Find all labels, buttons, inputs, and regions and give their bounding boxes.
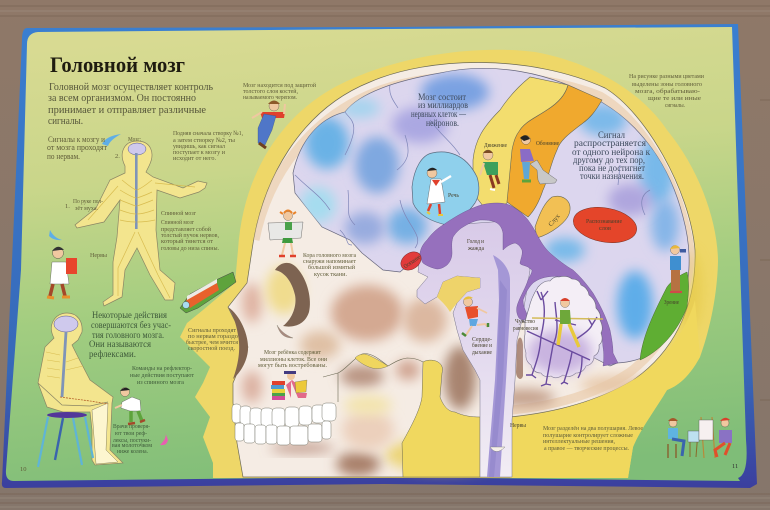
nose hollow (277, 325, 293, 338)
boy with dog (520, 135, 557, 184)
colour zones note: На рисунке разными цветами (629, 73, 704, 80)
spinal cord description: Спинной мозг (161, 219, 194, 226)
flap instruction text: увидишь, как сигнал (173, 143, 226, 150)
spinal cord description (161, 219, 219, 252)
zone: word recognition (571, 203, 639, 247)
icon: blue flap marks (49, 134, 121, 240)
train speed caption: по нервам гораздо (188, 333, 238, 340)
zone labels: Обоняние (536, 140, 559, 147)
skull caption: толстого слоя костей, (243, 88, 298, 95)
reflex text: рефлексами. (89, 349, 136, 360)
neurons caption: нервных клеток — (411, 109, 467, 119)
reflex commands caption: ные действия поступают (130, 372, 194, 379)
zone: word recognition: слов (599, 225, 611, 232)
neurons caption: из миллиардов (418, 100, 468, 110)
doctors hammer caption: Врачи проверя- (113, 423, 150, 430)
yellow patch above heartbeat zone (437, 276, 480, 312)
icon: pink flap mark (160, 432, 168, 445)
neurons caption: Мозг состоит (418, 92, 466, 102)
purple band (420, 203, 618, 366)
speech doctor (427, 168, 451, 215)
signal spread caption: распространяется (574, 138, 646, 148)
zone: movement (473, 77, 568, 215)
colour zones note: сигналы. (665, 102, 685, 109)
hemispheres caption (543, 425, 643, 452)
reflex text (89, 310, 171, 360)
reflex commands caption (130, 365, 194, 386)
zone: smell (507, 85, 602, 217)
caption: signals through nerves (47, 135, 107, 161)
reflex commands caption: Команды на рефлектор- (132, 365, 192, 372)
signal spread caption: от одного нейрона к (572, 147, 651, 157)
spinal cord description: толстый пучок нервов, (161, 232, 219, 239)
zone: hearing (535, 196, 570, 238)
zone labels: Сердце- (472, 336, 492, 343)
doctors hammer caption: вая молоточком (112, 442, 152, 449)
cortex caption: кусок ткани. (314, 271, 347, 278)
cortex caption (303, 252, 356, 278)
tightrope walker (532, 298, 603, 347)
cortex caption: большой измятый (308, 264, 355, 271)
page numbers: 11 (732, 463, 738, 470)
doctors hammer caption: ниже колена. (117, 448, 148, 455)
man with binoculars (670, 245, 686, 292)
neurons caption: нейронов. (426, 118, 459, 128)
zone labels: Движение (484, 142, 507, 149)
man scratching head (252, 100, 285, 148)
labels on nervous system figure: 2. (115, 153, 120, 160)
doctors hammer caption: лексы, постуки- (113, 437, 151, 444)
caption: signals through nerves: Сигналы к мозгу и (48, 135, 106, 144)
cerebellum (524, 276, 602, 386)
signal spread caption: пока не достигнет (579, 163, 645, 173)
hemispheres caption: интеллектуальные решения, (543, 438, 615, 445)
caption: signals through nerves: по нервам. (47, 152, 80, 161)
skull caption: называемого черепом. (243, 94, 297, 101)
signal spread caption (572, 130, 651, 181)
labels on nervous system figure: Мозг: (128, 136, 141, 143)
spinal cord description: головы до низа спины. (161, 245, 219, 252)
zone: speech bubble: Речь (448, 192, 459, 199)
eye socket (275, 263, 310, 327)
yellow lower band right of the spine (512, 300, 700, 478)
flap instruction text (173, 130, 243, 162)
intro text: принимает и отправляет различные (48, 104, 206, 116)
skull caption: Мозг находится под защитой (243, 82, 316, 89)
figure 2: seated reflex body (38, 313, 123, 465)
reflex text: Некоторые действия (92, 310, 168, 321)
flap instruction text: исходит от него. (173, 155, 216, 162)
intro text: за всем организмом. Он постоянно (48, 92, 196, 104)
brain hemisphere (293, 68, 689, 366)
doctor with clipboard (47, 247, 77, 298)
page numbers (20, 463, 738, 473)
signal spread caption: Сигнал (598, 130, 625, 140)
labels on nervous system figure: Нервы (90, 252, 108, 259)
yellow lower head area (402, 360, 480, 477)
zone: hearing: Слух (547, 212, 562, 228)
cortex caption: Кора головного мозга (303, 252, 356, 259)
train speed caption: скоростной поезд. (188, 345, 235, 352)
title: Головной мозг (50, 52, 185, 77)
hemispheres caption: полушарие контролирует сложные (543, 432, 633, 439)
reflex text: Они называются (89, 340, 152, 350)
zone: word recognition: Распознавание (586, 218, 622, 225)
labels on nervous system figure: Спинной мозг (161, 210, 196, 217)
train speed caption (186, 327, 238, 352)
zone labels: Нервы (510, 422, 527, 429)
jaw line (323, 354, 423, 402)
signal spread caption: другому до тех пор, (573, 155, 645, 165)
brown notch beside cerebellum (516, 338, 523, 379)
doctors hammer caption (112, 423, 152, 455)
reflex commands caption: из спинного мозга (137, 379, 184, 386)
purple stool (38, 412, 93, 467)
flap instruction text: Подняв сначала створку №1, (173, 130, 243, 137)
head silhouette: skull band (180, 50, 718, 478)
intro text: Головной мозг осуществляет контроль (49, 81, 213, 93)
colour zones note: щие те или иные (648, 95, 701, 102)
spinal cord description: который тянется от (161, 238, 213, 245)
red zone: Осязание (402, 254, 422, 270)
yellow jaw patch (355, 354, 388, 369)
colour zones note: выделены зоны головного (632, 81, 702, 88)
figure 1: nervous system body (75, 141, 207, 306)
spinal cord description: представляет собой (161, 226, 211, 233)
cortex caption: снаружи напоминает (303, 258, 356, 265)
child brain caption: миллионы клеток. Все они (260, 356, 327, 363)
caption: signals through nerves: от мозга проходят (47, 143, 107, 152)
intro text (48, 81, 213, 127)
girl with map (268, 210, 303, 256)
skull caption (243, 82, 316, 101)
teeth (232, 403, 336, 445)
painters with easels (668, 417, 732, 458)
doctor with hammer (115, 388, 145, 424)
page numbers: 10 (20, 466, 26, 473)
zone: speech bubble (412, 152, 479, 225)
runner (462, 296, 488, 336)
hemispheres caption: а правое — творческие процессы. (544, 445, 629, 452)
zone labels: дыхание (472, 349, 492, 356)
child brain caption: Мозг ребёнка содержит (264, 349, 321, 356)
neurons caption (411, 92, 468, 128)
child brain caption: могут быть востребованы. (258, 362, 327, 369)
zone labels (467, 140, 559, 429)
zone: vision (640, 272, 689, 360)
train speed caption: Сигналы проходят (188, 327, 236, 334)
child brain caption (258, 349, 327, 369)
labels on nervous system figure (65, 136, 196, 259)
colour zones note (629, 73, 704, 109)
zone labels: равновесия (513, 325, 538, 332)
reflex text: совершаются без учас- (91, 320, 171, 331)
intro text: сигналы. (48, 115, 83, 127)
mover figure (480, 150, 499, 190)
child reading on books (271, 371, 307, 400)
signal spread caption: точки назначения. (580, 171, 644, 181)
colour zones note: мозга, обрабатываю- (635, 88, 700, 95)
train (180, 272, 236, 313)
labels on nervous system figure: зёт муха. (75, 205, 98, 212)
zone labels: Чувство (515, 318, 535, 325)
red zone (397, 248, 425, 274)
labels on nervous system figure: 1. (65, 203, 70, 210)
zone: vision: Зрение (664, 299, 679, 306)
brainstem and spinal cord (417, 220, 530, 477)
cheek crescent (228, 307, 248, 379)
flap instruction text: а затем створку №2, ты (173, 137, 236, 144)
zone labels: Голод и (467, 238, 484, 245)
flap instruction text: поступает к мозгу и (173, 149, 225, 156)
doctors hammer caption: ют твои реф- (115, 430, 147, 437)
labels on nervous system figure: По руке пол- (73, 198, 103, 205)
hemispheres caption: Мозг разделён на два полушария. Левое (543, 425, 643, 432)
reflex text: тия головного мозга. (92, 331, 164, 341)
zone labels: жажда (467, 245, 484, 252)
train speed caption: быстрее, чем мчится (186, 339, 238, 346)
zone labels: биение и (472, 342, 492, 349)
skull watercolour shading (242, 75, 690, 476)
